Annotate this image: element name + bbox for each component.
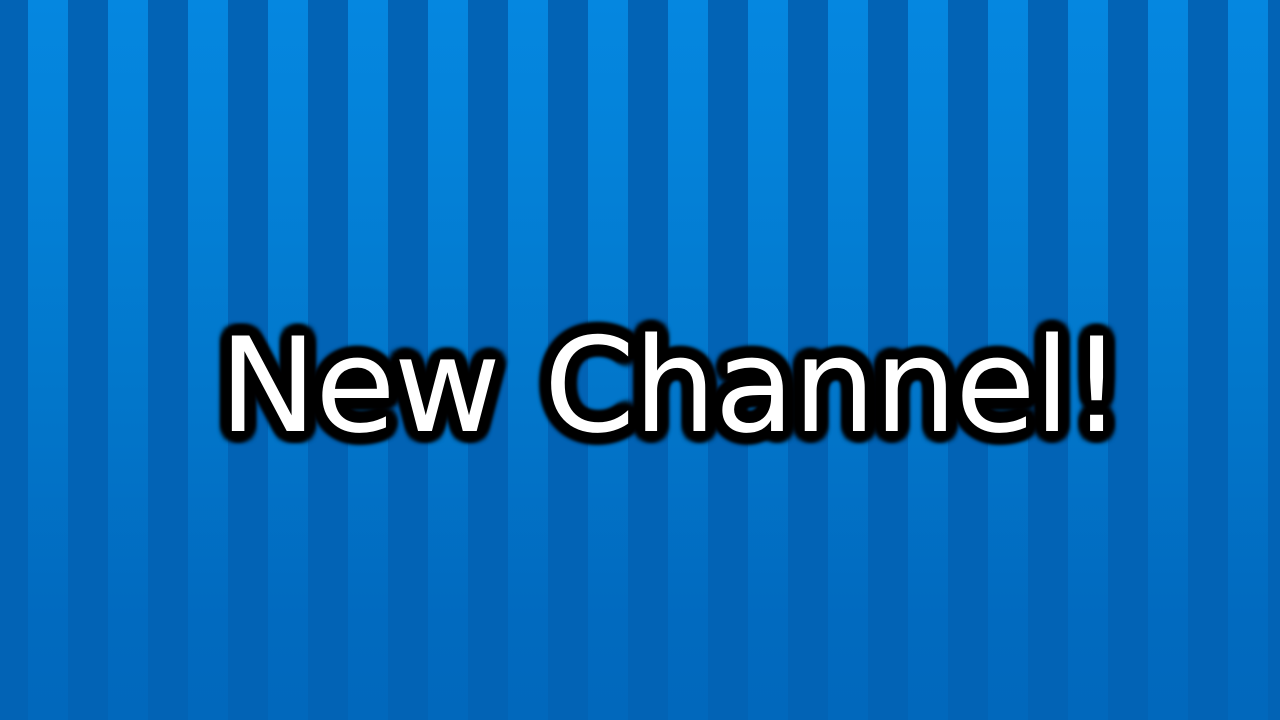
- title: New Channel!: [219, 309, 1121, 462]
